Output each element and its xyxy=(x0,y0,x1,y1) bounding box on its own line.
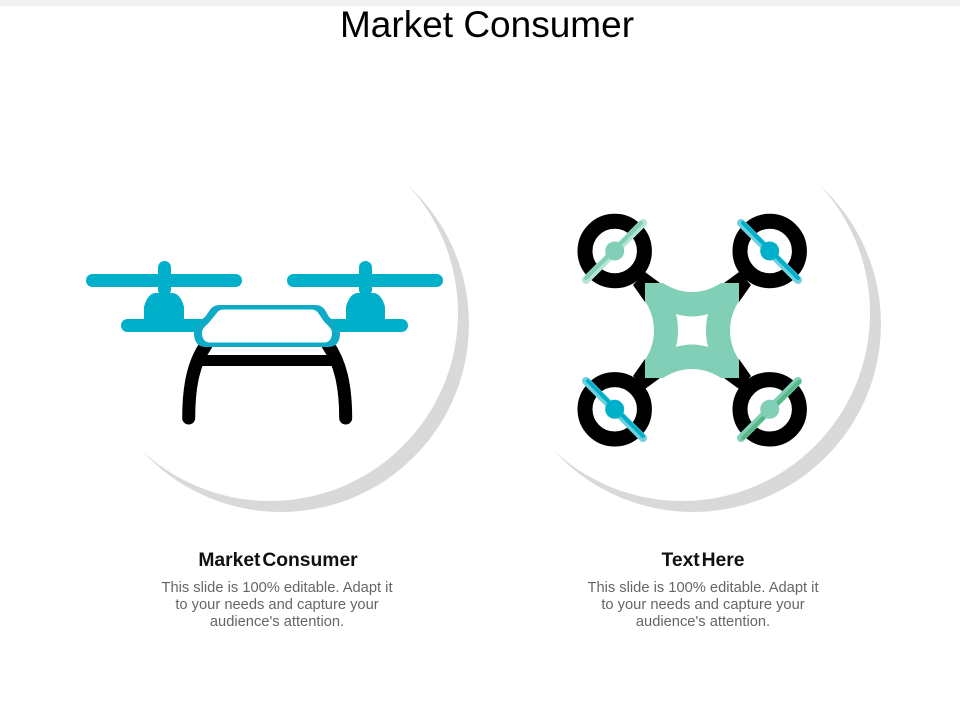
top band xyxy=(0,0,960,6)
motor rings xyxy=(585,221,799,439)
title: Market Consumer xyxy=(340,4,634,45)
heading: market consumer: Market Consumer xyxy=(198,550,358,571)
drone body window xyxy=(202,310,332,342)
rotor top left xyxy=(586,223,643,280)
icon: side view drone xyxy=(86,261,443,418)
text block: right description: This slide is 100% editable. Adapt it xyxy=(587,580,819,596)
rotor bottom right xyxy=(741,381,799,438)
center frame xyxy=(645,283,739,378)
text block: right description: audience's attention. xyxy=(636,614,770,630)
landing gear xyxy=(189,345,346,418)
rotor top right xyxy=(741,223,798,280)
text block: right description: to your needs and capture your xyxy=(601,597,805,613)
text block: left description: This slide is 100% editable. Adapt it xyxy=(161,580,393,596)
rotors and arms xyxy=(86,261,443,332)
text block: right description xyxy=(587,580,819,630)
heading: text here: Text Here xyxy=(662,550,744,571)
panel: right circle xyxy=(494,125,881,512)
text block: left description xyxy=(161,580,393,630)
frame arms xyxy=(633,272,751,389)
rotor bottom left xyxy=(586,381,643,438)
drone body xyxy=(194,305,340,347)
icon: top view drone xyxy=(585,221,799,439)
text block: left description: to your needs and capture your xyxy=(175,597,379,613)
panel: left circle xyxy=(82,125,469,512)
text block: left description: audience's attention. xyxy=(210,614,344,630)
